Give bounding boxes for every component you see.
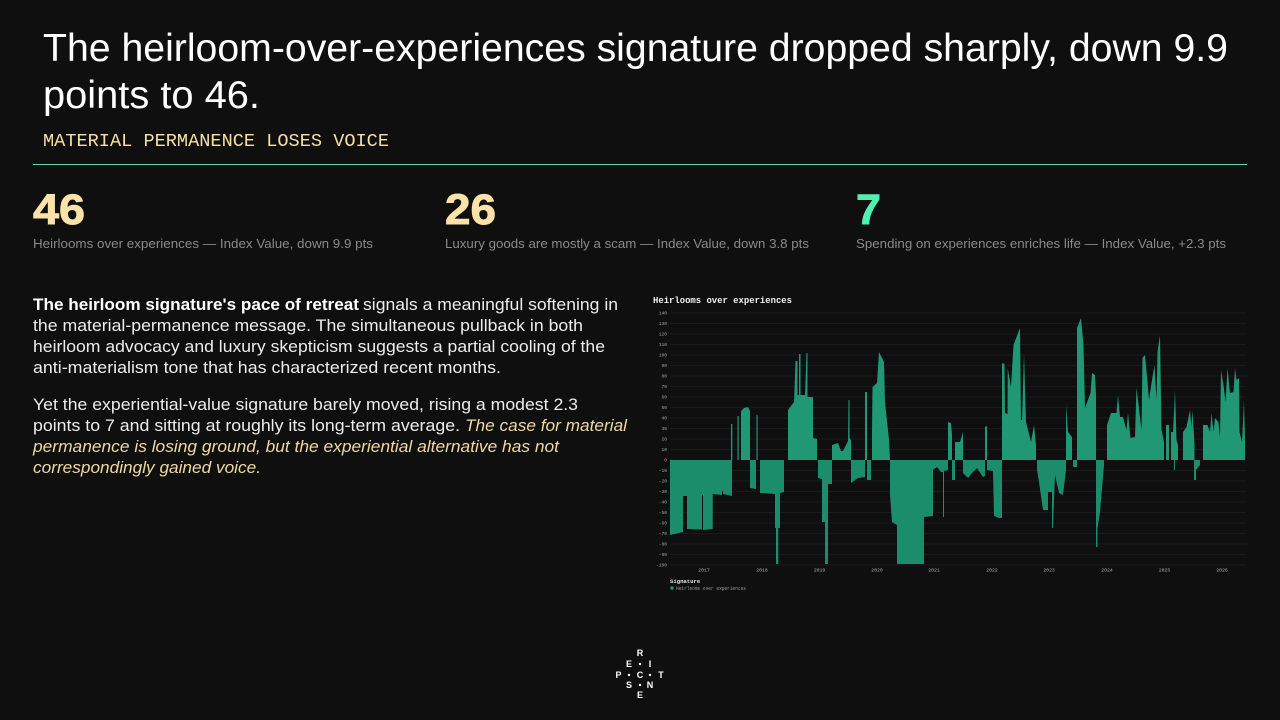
logo: T: [658, 670, 664, 680]
x axis labels: 2018: [756, 568, 768, 574]
y axis: 10: [661, 447, 667, 453]
legend: Heirlooms over experiences: [676, 586, 746, 592]
legend: [670, 578, 746, 592]
x axis labels: [698, 568, 1228, 574]
area series: [670, 460, 1245, 564]
paragraph: experiential value: The case for material: [465, 417, 628, 435]
y axis: 140: [659, 311, 667, 317]
y axis: 50: [661, 405, 667, 411]
paragraph: pace of retreat: heirloom advocacy and luxury skepticism suggests a partial cooling of the: [33, 338, 605, 356]
x axis labels: 2023: [1043, 568, 1055, 574]
logo: I: [649, 659, 651, 669]
y axis: -20: [659, 479, 667, 485]
x axis labels: 2020: [871, 568, 883, 574]
y axis: 120: [659, 332, 667, 338]
paragraph: pace of retreat: anti-materialism tone that has characterized recent months.: [33, 359, 501, 377]
y axis: -60: [659, 521, 667, 527]
title: points to 46.: [43, 74, 260, 117]
x axis labels: 2025: [1159, 568, 1170, 574]
chart: heirlooms over experiences: [653, 296, 1246, 592]
y axis: -50: [659, 510, 667, 516]
logo: E: [626, 659, 632, 669]
y axis: 130: [659, 321, 667, 327]
y axis: 40: [661, 416, 667, 422]
y axis: 60: [661, 395, 667, 401]
y axis: [656, 311, 1246, 569]
y axis: -40: [659, 500, 667, 506]
y axis: 100: [659, 353, 667, 359]
x axis labels: 2019: [814, 568, 825, 574]
title: The heirloom-over-experiences signature dropped sharply, down 9.9: [43, 27, 1228, 70]
y axis: -100: [656, 563, 667, 569]
paragraph: experiential value: [32, 396, 628, 477]
logo: P: [615, 670, 622, 680]
legend: Signature: [670, 578, 701, 585]
paragraph: pace of retreat: signals a meaningful softening in: [363, 296, 618, 314]
chart title: Heirlooms over experiences: [653, 296, 792, 306]
paragraph: experiential value: points to 7 and sitting at roughly its long-term average.: [33, 417, 460, 435]
stat: heirlooms: 46: [33, 186, 85, 234]
stat: experiences: Spending on experiences enriches life — Index Value, +2.3 pts: [856, 236, 1227, 251]
x axis labels: 2017: [698, 568, 710, 574]
y axis: 110: [659, 342, 667, 348]
paragraph: pace of retreat: The heirloom signature's pace of retreat: [33, 296, 360, 314]
stat: luxury: Luxury goods are mostly a scam — Index Value, down 3.8 pts: [445, 236, 810, 251]
y axis: -10: [659, 468, 667, 474]
paragraph: pace of retreat: [33, 296, 618, 377]
stat: experiences: 7: [856, 186, 881, 234]
stat: heirlooms: Heirlooms over experiences — Index Value, down 9.9 pts: [33, 236, 374, 251]
stat: luxury: 26: [445, 186, 496, 234]
y axis: -70: [659, 531, 667, 537]
logo: [615, 648, 664, 700]
logo: C: [637, 670, 644, 680]
logo: R: [637, 648, 644, 658]
stat: heirlooms: [33, 186, 374, 251]
y axis: 0: [664, 458, 667, 464]
y axis: 20: [661, 437, 667, 443]
y axis: -90: [659, 552, 667, 558]
y axis: 30: [661, 426, 667, 432]
y axis: -80: [659, 542, 667, 548]
y axis: -30: [659, 489, 667, 495]
x axis labels: 2021: [928, 568, 940, 574]
stat: experiences: [856, 186, 1227, 251]
paragraph: experiential value: correspondingly gained voice.: [33, 459, 261, 477]
x axis labels: 2024: [1101, 568, 1113, 574]
subtitle: MATERIAL PERMANENCE LOSES VOICE: [43, 131, 389, 152]
logo: N: [647, 680, 653, 690]
paragraph: experiential value: Yet the experiential-value signature barely moved, rising a modest 2.3: [33, 396, 578, 414]
paragraph: experiential value: permanence is losing ground, but the experiential alternative has not: [32, 438, 560, 456]
x axis labels: 2026: [1216, 568, 1228, 574]
logo: S: [626, 680, 632, 690]
logo: E: [637, 690, 643, 700]
title: [43, 27, 1228, 117]
x axis labels: 2022: [986, 568, 998, 574]
y axis: 70: [661, 384, 667, 390]
stat: luxury: [445, 186, 810, 251]
y axis: 90: [661, 363, 667, 369]
y axis: 80: [661, 374, 667, 380]
paragraph: pace of retreat: the material-permanence message. The simultaneous pullback in both: [33, 317, 583, 335]
